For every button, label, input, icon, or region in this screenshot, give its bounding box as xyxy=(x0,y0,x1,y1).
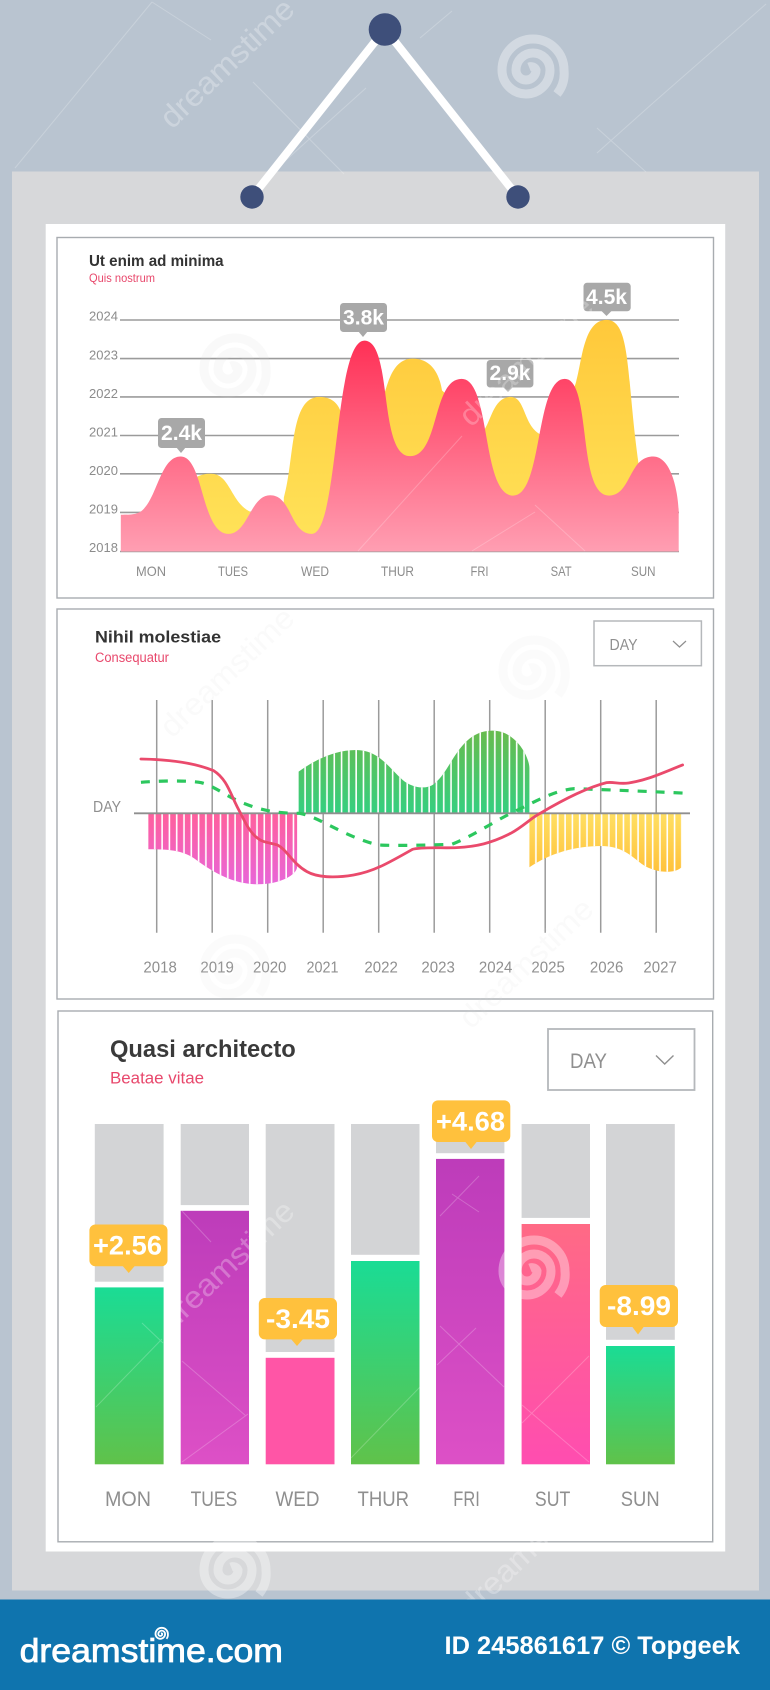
day axis labels: THUR xyxy=(381,563,414,579)
callout: 3.8k xyxy=(340,303,387,337)
footer band xyxy=(0,1600,770,1690)
subheading: Beatae vitae: Beatae vitae xyxy=(110,1069,204,1088)
dropdown: DAY xyxy=(548,1029,694,1090)
year axis labels: 2019 xyxy=(89,502,118,516)
year axis labels: 2025 xyxy=(531,960,565,977)
striped yellow area xyxy=(529,813,681,872)
callout: 4.5k xyxy=(584,283,631,316)
red line xyxy=(141,759,683,877)
dropdown: DAY xyxy=(594,621,701,666)
watermark words: dreamstime xyxy=(452,891,600,1035)
callout: -3.45 xyxy=(259,1298,337,1346)
footer credit: ID 245861617 © Topgeek xyxy=(444,1632,740,1660)
day axis labels: THUR xyxy=(358,1488,409,1511)
subheading: Quis nostrum: Quis nostrum xyxy=(89,271,155,285)
bar: SUT xyxy=(522,1124,590,1464)
callout: -8.99 xyxy=(600,1285,678,1334)
bar: FRI xyxy=(436,1124,504,1464)
pink area series xyxy=(121,341,679,551)
day axis labels xyxy=(136,563,656,579)
footer logo: dreamstime.com: dreamstime.com xyxy=(20,1632,283,1669)
hanger: strings and pins xyxy=(240,13,530,209)
day axis labels: FRI xyxy=(470,563,488,579)
callout: 2.9k: 2.9k xyxy=(490,362,531,385)
year axis labels: 2021 xyxy=(306,960,338,977)
watermark words: dreamstime xyxy=(153,0,301,135)
day axis labels: TUES xyxy=(218,563,248,579)
callout: -8.99: -8.99 xyxy=(607,1291,671,1321)
year axis labels: 2018 xyxy=(143,960,177,977)
bar: WED xyxy=(266,1124,334,1464)
heading: Quasi architecto: Quasi architecto xyxy=(110,1036,296,1063)
day axis labels xyxy=(105,1488,660,1511)
year axis labels xyxy=(89,309,118,555)
year axis labels: 2022 xyxy=(89,386,118,401)
dashed green line xyxy=(141,781,688,845)
watermark spirals xyxy=(204,39,565,1594)
year axis labels: 2023 xyxy=(421,960,455,977)
year axis labels: 2022 xyxy=(364,960,398,977)
panel: area chart xyxy=(57,238,714,598)
bar: THUR xyxy=(351,1124,420,1464)
year axis labels: 2019 xyxy=(200,960,234,977)
day axis labels: WED xyxy=(276,1488,320,1511)
day axis labels: WED xyxy=(301,563,329,579)
axis label: DAY: DAY xyxy=(93,799,121,816)
day axis labels: SUN xyxy=(631,563,656,579)
heading: Nihil molestiae: Nihil molestiae xyxy=(95,628,221,647)
callout: +4.68: +4.68 xyxy=(436,1107,505,1137)
day axis labels: MON xyxy=(105,1488,151,1511)
day axis labels: SAT xyxy=(551,563,572,579)
watermark words xyxy=(153,0,600,1623)
watermark words: dreamstime xyxy=(153,600,301,744)
dropdown: DAY: DAY xyxy=(570,1050,607,1073)
year axis labels xyxy=(143,960,677,977)
year axis labels: 2020 xyxy=(253,960,287,977)
day axis labels: SUN xyxy=(621,1488,660,1511)
heading: Ut enim ad minima: Ut enim ad minima xyxy=(89,253,224,270)
callout: 3.8k: 3.8k xyxy=(343,306,384,330)
year axis labels: 2020 xyxy=(89,463,118,478)
bar: SUN xyxy=(606,1124,675,1464)
white sheet xyxy=(46,224,725,1552)
callout: 4.5k: 4.5k xyxy=(586,286,627,309)
callout: 2.9k xyxy=(487,360,533,392)
panel: bar chart xyxy=(58,1011,713,1542)
year axis labels: 2024 xyxy=(479,960,513,977)
callout: 2.4k xyxy=(158,418,205,453)
bar: TUES xyxy=(181,1124,249,1464)
callout: +2.56 xyxy=(89,1224,168,1273)
callout: +4.68 xyxy=(432,1100,510,1149)
yellow area series xyxy=(194,320,638,543)
year axis labels: 2026 xyxy=(590,960,623,977)
year axis labels: 2027 xyxy=(643,960,677,977)
watermark words: dreamstime xyxy=(452,289,600,433)
callout: +2.56: +2.56 xyxy=(93,1230,162,1260)
callout: 2.4k: 2.4k xyxy=(161,422,202,445)
year axis labels: 2024 xyxy=(89,309,118,324)
day axis labels: TUES xyxy=(191,1488,237,1511)
dropdown: DAY: DAY xyxy=(610,637,638,654)
year axis labels: 2023 xyxy=(89,347,118,362)
year axis labels: 2021 xyxy=(89,424,118,440)
subheading: Consequatur: Consequatur xyxy=(95,650,169,665)
striped green area xyxy=(299,731,529,813)
callout: -3.45: -3.45 xyxy=(266,1304,330,1334)
day axis labels: FRI xyxy=(453,1488,480,1511)
bar: MON xyxy=(95,1124,164,1464)
watermark words: dreamstime xyxy=(452,1479,600,1623)
day axis labels: MON xyxy=(136,563,166,579)
year axis labels: 2018 xyxy=(89,540,118,555)
watermark words: dreamstime xyxy=(153,1193,301,1337)
striped pink area xyxy=(148,813,297,884)
panel: striped line chart xyxy=(57,609,714,999)
day axis labels: SUT xyxy=(535,1488,570,1511)
